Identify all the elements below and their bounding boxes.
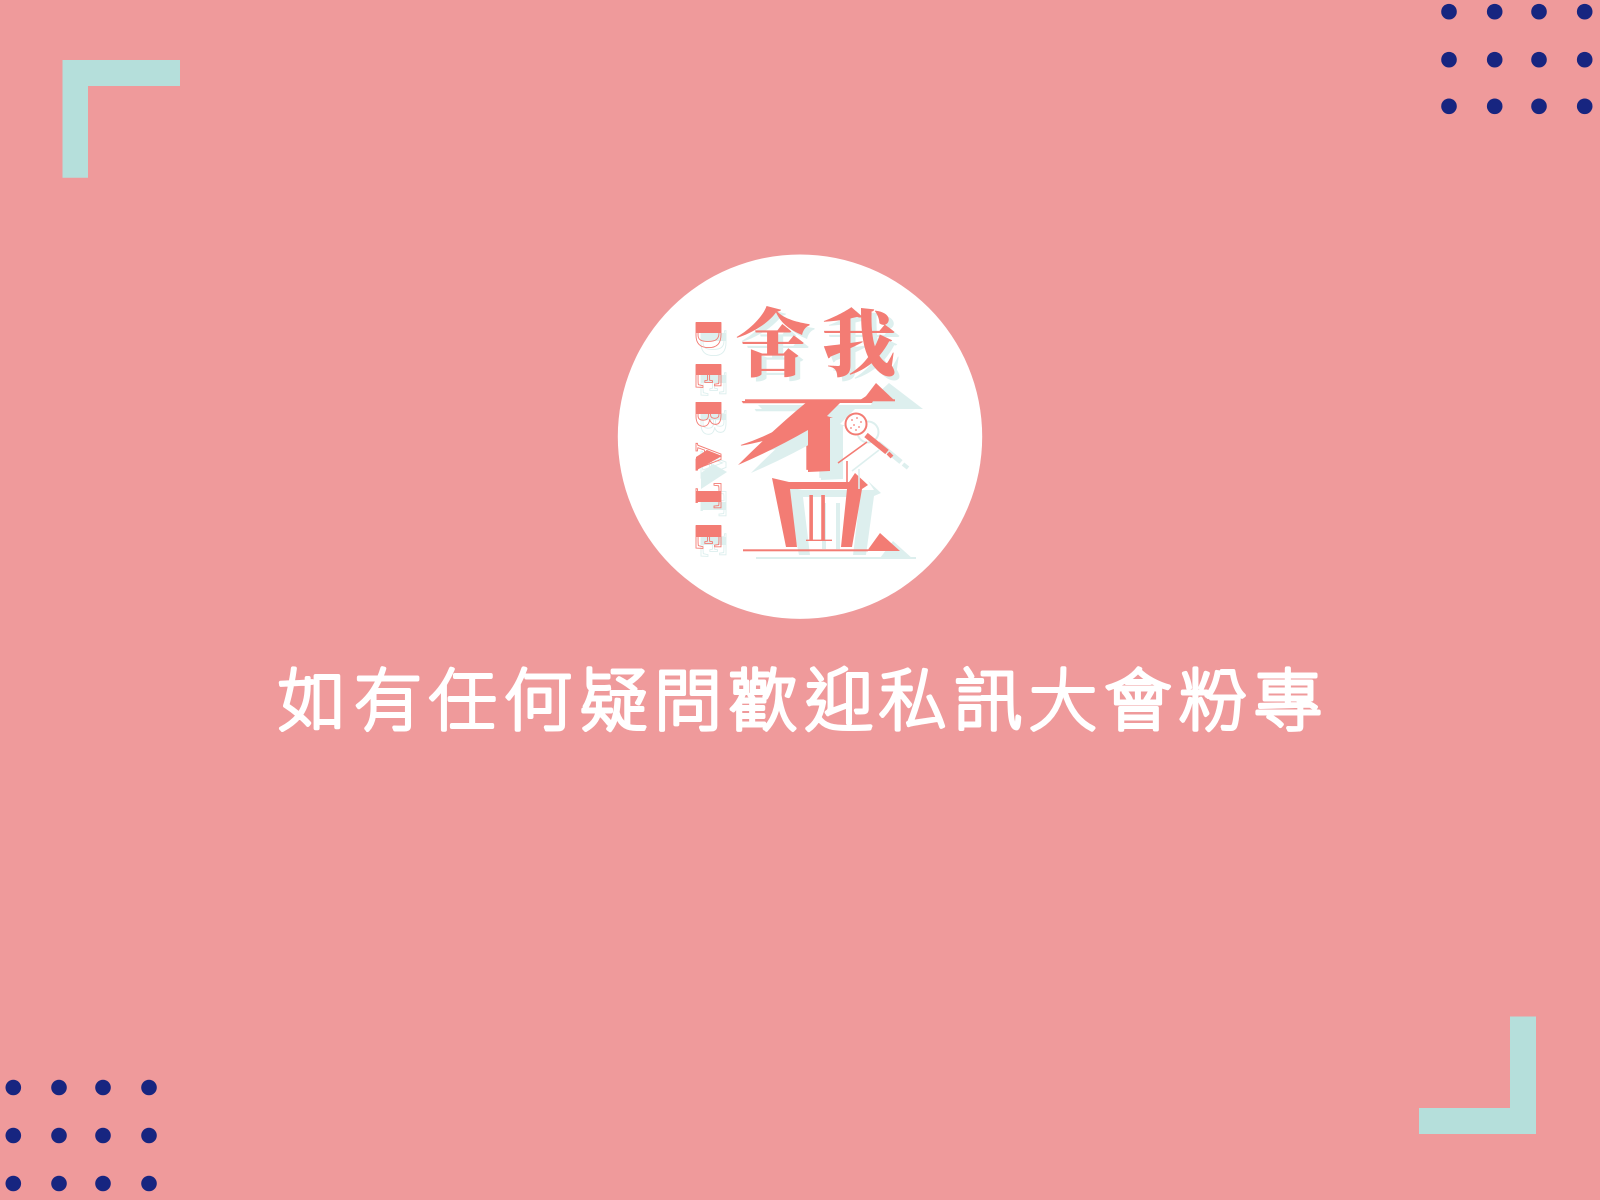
- top stroke accent: [738, 383, 923, 480]
- vertical word: DEBATE shadow slices: E: [692, 533, 734, 558]
- vertical word: DEBATE shadow outline: T: [692, 491, 734, 516]
- logo text shadow: 舍我不: 不: [749, 397, 924, 488]
- logo badge: [618, 255, 982, 619]
- letter A shadow: [701, 464, 727, 489]
- letter A solid: [696, 450, 722, 470]
- vertical word: DEBATE shadow outline: [692, 330, 734, 558]
- logo text: 舍我不: 舍: [736, 305, 810, 387]
- vertical word: DEBATE shadow outline: A: [692, 451, 734, 479]
- mask over the right dot of the glyph: [833, 403, 925, 482]
- vertical word: DEBATE outline: T: [687, 483, 729, 508]
- vertical word: DEBATE shadow slices: [702, 333, 726, 545]
- vertical word: DEBATE solid slices: B: [687, 402, 729, 427]
- logo text shadow: 舍我不: 舍: [741, 309, 815, 391]
- vertical word: DEBATE shadow slices: D: [692, 330, 734, 357]
- vertical word: DEBATE solid slices: [696, 322, 721, 537]
- vertical word: DEBATE shadow slices: B: [692, 410, 734, 435]
- microphone shadow: [852, 422, 908, 489]
- vertical word: DEBATE outline: [687, 322, 729, 550]
- cup shadow: [756, 481, 916, 559]
- vertical word: DEBATE outline: A: [687, 443, 729, 471]
- microphone: [838, 414, 892, 482]
- vertical word: DEBATE outline: D: [687, 322, 729, 349]
- dot grid: top right: [1441, 4, 1592, 114]
- vertical word: DEBATE outline: E: [687, 525, 729, 550]
- vertical word: DEBATE shadow outline: E: [692, 372, 734, 397]
- logo text shadow: 舍我不: 我: [827, 309, 901, 391]
- cup glyph 皿: 皿: [789, 469, 846, 560]
- vertical word: DEBATE shadow outline: E: [692, 533, 734, 558]
- vertical word: DEBATE shadow outline: B: [692, 410, 734, 435]
- vertical word: DEBATE solid slices: T: [687, 483, 729, 508]
- vertical word: DEBATE solid slices: E: [687, 525, 729, 550]
- logo text: 舍我不: 不: [736, 389, 911, 480]
- vertical word: DEBATE shadow slices: T: [692, 491, 734, 516]
- logo text: 舍我不: 我: [822, 305, 896, 387]
- white circle: [618, 255, 982, 619]
- logo text: 舍我不: [736, 305, 911, 480]
- cup body: [743, 473, 900, 551]
- corner bracket: bottom right: [1419, 1016, 1536, 1134]
- vertical word: DEBATE shadow slices: E: [692, 372, 734, 397]
- dot grid: bottom left: [6, 1080, 157, 1191]
- vertical word: DEBATE outline: E: [687, 364, 729, 389]
- logo text shadow: 舍我不: [741, 309, 924, 488]
- vertical word: DEBATE solid slices: D: [687, 322, 729, 349]
- vertical word: DEBATE outline: B: [687, 402, 729, 427]
- title: 如有任何疑問歡迎私訊大會粉專: [278, 664, 1322, 740]
- vertical word: DEBATE solid slices: E: [687, 364, 729, 389]
- vertical word: DEBATE shadow outline: D: [692, 330, 734, 357]
- corner bracket: top left: [62, 60, 180, 178]
